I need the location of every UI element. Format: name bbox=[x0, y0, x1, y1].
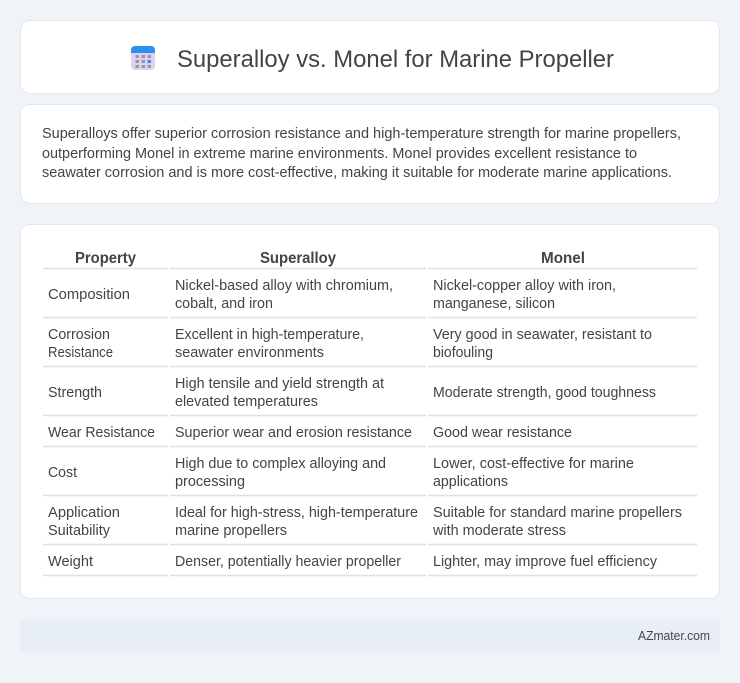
row: weight: Denser, potentially heavier propeller bbox=[175, 554, 401, 570]
row: cost: High due to complex alloying and bbox=[175, 456, 386, 472]
panel: summary bbox=[20, 104, 720, 204]
row: application suitability bbox=[48, 505, 682, 539]
row: weight: Weight bbox=[48, 554, 93, 570]
row: composition: Composition bbox=[48, 287, 130, 303]
row: wear resistance: Superior wear and erosion resistance bbox=[175, 425, 412, 441]
row: weight bbox=[48, 554, 658, 570]
row: composition bbox=[48, 278, 616, 312]
row: weight: Lighter, may improve fuel efficiency bbox=[433, 554, 658, 570]
table header: Superalloy bbox=[260, 250, 336, 267]
row: cost: applications bbox=[433, 474, 508, 490]
row: wear resistance: Good wear resistance bbox=[433, 425, 572, 441]
row: corrosion resistance: Corrosion bbox=[48, 327, 110, 343]
row: corrosion resistance: Excellent in high-temperature, bbox=[175, 327, 364, 343]
row: cost: Lower, cost-effective for marine bbox=[433, 456, 634, 472]
row: corrosion resistance: seawater environments bbox=[175, 345, 324, 361]
row: strength: elevated temperatures bbox=[175, 394, 318, 410]
row: application suitability: Suitability bbox=[48, 523, 111, 539]
row: application suitability: marine propellers bbox=[175, 523, 287, 539]
table header: Property bbox=[75, 250, 136, 267]
row: strength bbox=[48, 376, 656, 410]
row: strength: High tensile and yield strength at bbox=[175, 376, 384, 392]
row: application suitability: with moderate stress bbox=[432, 523, 566, 539]
row: application suitability: Application bbox=[48, 505, 120, 521]
row: corrosion resistance: Very good in seawater, resistant to bbox=[433, 327, 652, 343]
row: cost: processing bbox=[175, 474, 245, 490]
title: Superalloy vs. Monel for Marine Propeller bbox=[177, 46, 614, 73]
row: composition: cobalt, and iron bbox=[175, 296, 273, 312]
table header bbox=[75, 250, 585, 267]
row: strength: Moderate strength, good toughness bbox=[433, 385, 656, 401]
footer: AZmater.com bbox=[638, 629, 710, 643]
row: corrosion resistance bbox=[48, 327, 652, 361]
panel: title card bbox=[20, 20, 720, 94]
row: wear resistance bbox=[48, 425, 572, 441]
table header: Monel bbox=[541, 250, 585, 267]
summary text: Superalloys offer superior corrosion resistance and high-temperature strength for marine propellers, bbox=[42, 126, 681, 142]
row: corrosion resistance: Resistance bbox=[48, 345, 113, 361]
row: composition: manganese, silicon bbox=[433, 296, 555, 312]
row: cost bbox=[48, 456, 634, 490]
row: composition: Nickel-based alloy with chromium, bbox=[175, 278, 393, 294]
row: strength: Strength bbox=[48, 385, 102, 401]
panel: comparison table bbox=[20, 224, 720, 598]
row: corrosion resistance: biofouling bbox=[433, 345, 493, 361]
summary text: seawater corrosion and is more cost-effective, making it suitable for moderate marine applications. bbox=[42, 165, 672, 181]
row: application suitability: Suitable for standard marine propellers bbox=[433, 505, 682, 521]
row: wear resistance: Wear Resistance bbox=[48, 425, 155, 441]
row: composition: Nickel-copper alloy with iron, bbox=[433, 278, 616, 294]
row: cost: Cost bbox=[48, 465, 77, 481]
row: application suitability: Ideal for high-stress, high-temperature bbox=[175, 505, 418, 521]
icon: calendar grid bbox=[131, 46, 155, 70]
summary text bbox=[42, 126, 681, 181]
footer bbox=[20, 619, 720, 653]
summary text: outperforming Monel in extreme marine environments. Monel provides excellent resistance to bbox=[42, 146, 637, 162]
